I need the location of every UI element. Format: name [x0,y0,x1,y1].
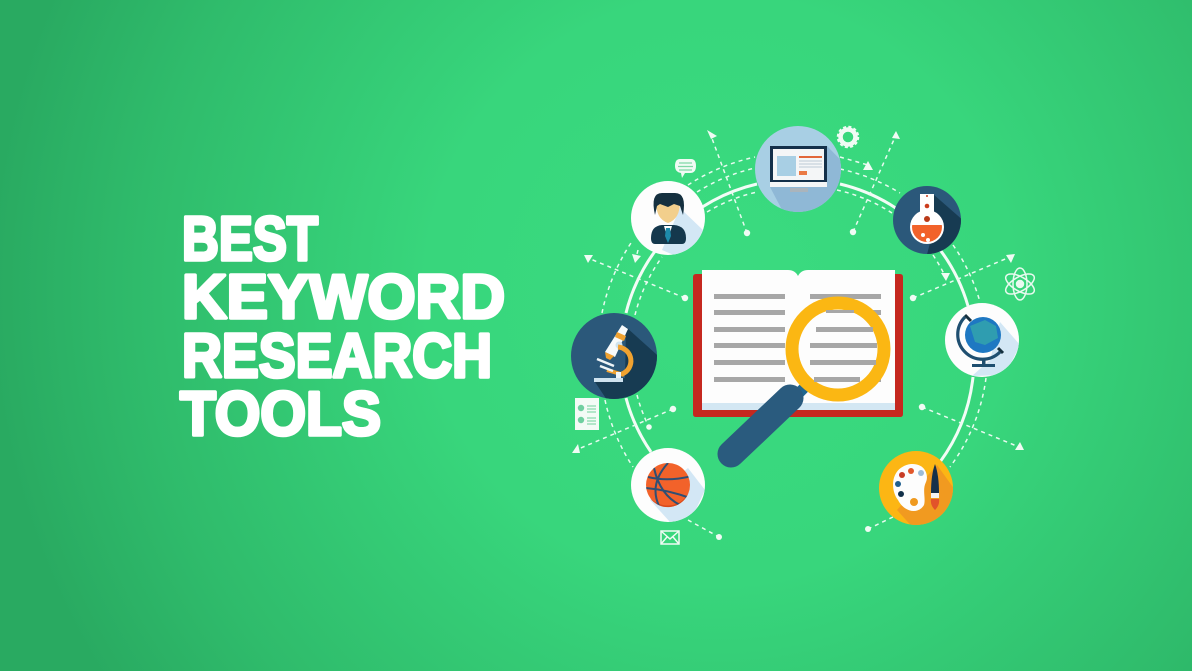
book cover [693,274,903,417]
text lines right page [810,294,881,382]
icon circle: flask [893,186,961,254]
icon circle: palette [879,451,955,530]
handle neck [794,386,806,398]
icon circle: globe [945,303,1020,377]
dashed arrow: top right [850,131,900,235]
book [693,270,903,417]
title [180,205,505,449]
icon: report document [575,398,599,430]
title: TOOLS [180,380,381,449]
dashed orbit arcs [602,157,986,537]
handle [731,398,790,454]
book pages [702,270,895,410]
dashed arrow: lower left [572,406,676,453]
icon: atom [1003,268,1037,300]
icon circle: person [631,181,705,262]
icon: envelope [661,531,679,544]
icon: speech bubble [675,159,696,178]
lens text lines [810,310,877,382]
icon circle: basketball [631,448,705,522]
dashed arrow: lower right [919,404,1024,450]
main solid ring [626,184,973,462]
icon circle: microscope [571,313,657,399]
title: KEYWORD [182,263,505,332]
dashed arrow: right upper [910,254,1015,301]
title: RESEARCH [182,322,492,391]
dashed arrow: top left [707,130,750,236]
icon circle: monitor [755,126,841,212]
title: BEST [182,205,318,274]
small triangles and dots [632,161,950,540]
icon: gear [838,127,858,147]
magnifying glass [731,303,884,454]
dashed arrow: left upper [584,255,688,301]
text lines left page [714,294,785,382]
lens [792,303,884,395]
